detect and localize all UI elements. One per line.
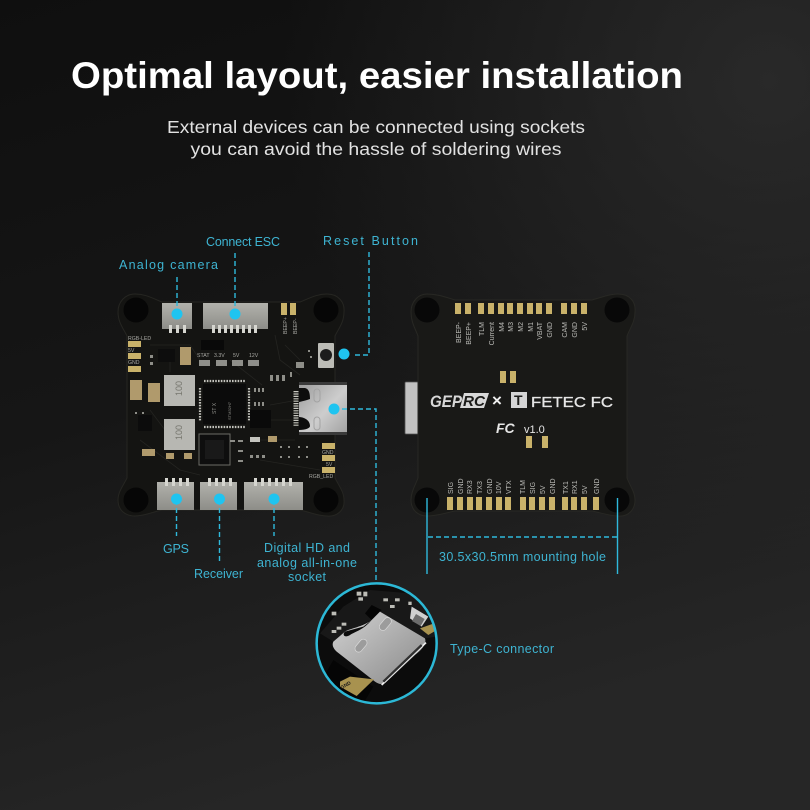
bottom pad labels: GND	[550, 478, 557, 494]
callout: reset button: Reset Button	[323, 234, 418, 248]
reset button	[318, 343, 334, 368]
title: Optimal layout, easier installation	[71, 55, 683, 96]
panel: front of flight controller board	[118, 294, 347, 516]
inductors: 100	[174, 381, 184, 396]
capacitors	[130, 347, 277, 459]
bottom pad labels: 5V	[582, 485, 589, 494]
top pad labels	[456, 321, 589, 345]
main processor chip: ST X	[212, 402, 218, 414]
silkscreen labels: 12V	[249, 353, 259, 359]
panel: back of flight controller board	[405, 294, 635, 516]
board outline	[411, 294, 635, 516]
top pad labels: M1	[528, 322, 535, 332]
sockets	[157, 303, 303, 510]
callout: digital HD and analog all-in-one socket: Digital HD and	[264, 541, 350, 555]
PCB traces and parts	[320, 590, 437, 642]
inductors	[164, 375, 195, 450]
top pad labels: 5V	[582, 322, 589, 331]
label: type-C connector: Type-C connector	[450, 642, 554, 656]
main processor chip: STM32H7	[227, 401, 232, 420]
callout: connect ESC: Connect ESC	[206, 235, 280, 249]
version marking: FC	[496, 420, 516, 436]
callout: USB-C leader line	[328, 404, 376, 584]
top pad labels: M4	[499, 322, 506, 332]
USB-C edge	[405, 382, 419, 434]
silkscreen labels: GND	[128, 360, 140, 366]
inductors: 100	[174, 425, 184, 440]
brand logos	[430, 391, 613, 411]
traces	[140, 335, 320, 475]
callout: digital HD and analog all-in-one socket	[257, 494, 357, 584]
top pad labels: BEEP-	[456, 321, 463, 343]
silkscreen labels: BEEP+	[283, 317, 289, 334]
silkscreen labels: 5V	[128, 348, 135, 354]
silkscreen labels: GND	[322, 450, 334, 456]
bottom pad labels: VTX	[506, 480, 513, 494]
top pad labels: VBAT	[537, 321, 544, 340]
bottom pad labels: SIG	[530, 482, 537, 494]
silkscreen labels: 5V	[233, 353, 240, 359]
solder pads	[128, 303, 335, 473]
version marking	[496, 420, 545, 436]
subtitle text: External devices can be connected using sockets	[167, 117, 585, 137]
silkscreen labels: STAT	[197, 353, 210, 359]
board outline	[118, 294, 344, 516]
callout: receiver	[194, 494, 243, 581]
panel: type-C connector magnified inset: GND	[340, 680, 353, 691]
bottom pad labels: 10V	[496, 481, 503, 494]
bottom pad labels: GND	[487, 478, 494, 494]
bottom pad labels: RX3	[467, 480, 474, 494]
silkscreen labels: RGB_LED	[309, 474, 333, 480]
top pad labels: GND	[547, 322, 554, 338]
callout: digital HD and analog all-in-one socket: analog all-in-one	[257, 556, 357, 570]
callout: analog camera	[119, 258, 218, 320]
bottom pad labels	[448, 478, 601, 494]
bottom pad labels: GND	[458, 478, 465, 494]
mounting holes	[124, 298, 338, 512]
brand logos: RC	[463, 393, 486, 410]
USB-C port	[296, 382, 347, 435]
socket pins	[165, 325, 292, 486]
secondary chips	[138, 340, 271, 465]
connector body	[333, 612, 425, 684]
bottom pad labels: SIG	[448, 482, 455, 494]
callout: reset button	[323, 234, 418, 360]
small parts in inset	[332, 592, 412, 633]
silkscreen labels: 3.3V	[214, 353, 225, 359]
main processor chip	[200, 381, 249, 427]
brand logos: T	[514, 392, 523, 408]
silkscreen labels	[128, 317, 334, 480]
bottom pad labels: GND	[594, 478, 601, 494]
callout: GPS	[163, 494, 189, 556]
center pads	[500, 371, 548, 448]
small components	[135, 350, 312, 462]
bottom pad labels: TX1	[563, 481, 570, 494]
bottom pad labels: 5V	[540, 485, 547, 494]
bottom pad labels: TX3	[477, 481, 484, 494]
callout: 30.5x30.5mm mounting hole	[427, 498, 618, 574]
top pad labels: M2	[518, 322, 525, 332]
bottom pad labels: TLM	[520, 480, 527, 494]
top pad labels: GND	[572, 322, 579, 338]
top pad labels: M3	[508, 322, 515, 332]
top pad labels: TLM	[479, 322, 486, 336]
bottom pad labels: RX1	[572, 480, 579, 494]
silkscreen labels: RGB-LED	[128, 336, 151, 342]
subtitle text: you can avoid the hassle of soldering wires	[190, 139, 562, 159]
callout: receiver: Receiver	[194, 567, 243, 581]
top pad labels: Current	[489, 322, 496, 345]
top pad labels: CAM	[562, 322, 569, 338]
solder pads in inset	[340, 677, 374, 696]
bottom solder pads	[447, 497, 599, 510]
top solder pads	[455, 303, 587, 314]
callout: digital HD and analog all-in-one socket: socket	[288, 570, 327, 584]
top pad labels: BEEP+	[466, 322, 473, 345]
callout: GPS: GPS	[163, 542, 189, 556]
callout: connect ESC	[206, 235, 280, 320]
subtitle text	[167, 117, 585, 159]
silkscreen labels: 5V	[326, 462, 333, 468]
silkscreen labels: BEEP-	[293, 318, 299, 334]
callout: analog camera: Analog camera	[119, 258, 218, 272]
brand logos: GEP	[430, 392, 463, 411]
mounting holes	[414, 298, 630, 512]
panel: type-C connector magnified inset	[317, 583, 437, 703]
version marking: v1.0	[524, 424, 545, 436]
status LEDs	[199, 360, 259, 366]
callout: 30.5x30.5mm mounting hole: 30.5x30.5mm mounting hole	[439, 550, 606, 564]
brand logos: ×	[492, 391, 502, 410]
brand logos: FETEC FC	[531, 394, 613, 411]
